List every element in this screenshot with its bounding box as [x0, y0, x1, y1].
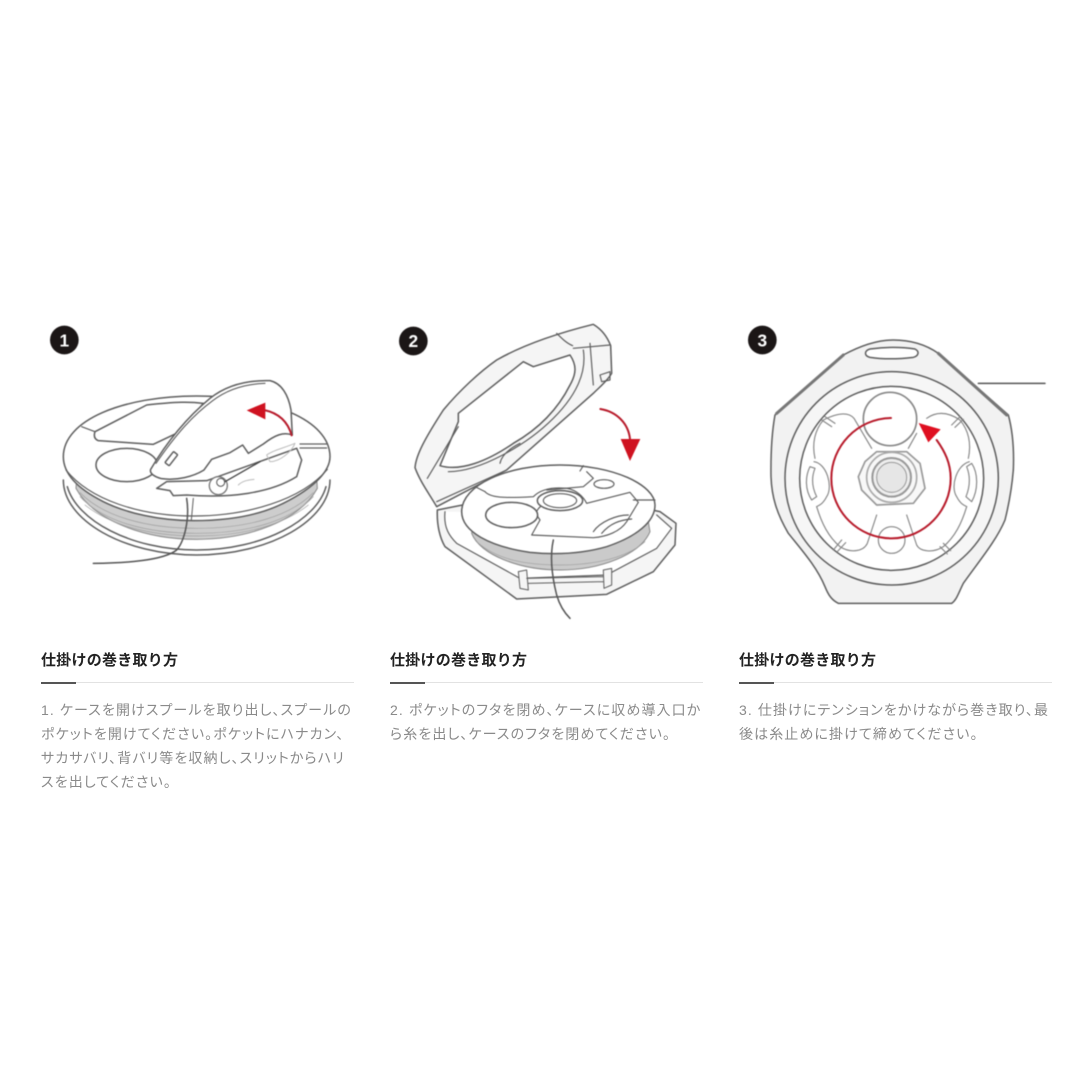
badge 3: 3: [758, 330, 768, 350]
body text 1: スを出してください。: [41, 774, 172, 790]
body text 1: [41, 702, 352, 790]
case base: [437, 488, 676, 599]
badge 2: [399, 327, 428, 355]
body text 3: [739, 702, 1049, 742]
hub: [858, 452, 925, 505]
body text 2: ら糸を出し、ケースのフタを閉めてください。: [390, 726, 671, 742]
text column 3: [739, 652, 1052, 742]
body text 1: ポケットを開けてください。ポケットにハナカン、: [41, 726, 344, 742]
leader line: [552, 540, 570, 618]
body text 1: サカサバリ、背バリ等を収納し、スリットからハリ: [41, 750, 345, 766]
heading 1: 仕掛けの巻き取り方: [41, 652, 178, 669]
rule 2: [390, 682, 703, 683]
open lid: [150, 381, 292, 479]
wound line: [76, 477, 317, 539]
text column 1: [41, 652, 354, 790]
red rotation arrow: [831, 418, 951, 538]
illustration 3: closed case from the back: [748, 326, 1045, 603]
leader line: [93, 498, 188, 563]
body text 1: 1. ケースを開けスプールを取り出し、スプールの: [41, 702, 352, 718]
badge 1: 1: [60, 330, 70, 350]
body text 3: 3. 仕掛けにテンションをかけながら巻き取り、最: [739, 702, 1049, 718]
open lid: [415, 324, 612, 507]
illustration 2: open case with spool: [399, 324, 676, 618]
rule 1: [41, 682, 354, 683]
badge 1: [50, 326, 79, 354]
hooks in pocket: [209, 443, 295, 495]
top disc: [63, 396, 330, 521]
text column 2: [390, 652, 703, 742]
bottom flange: [63, 480, 330, 555]
leader line: [978, 381, 1045, 386]
body text 2: 2. ポケットのフタを閉め、ケースに収め導入口か: [390, 702, 701, 718]
body text 3: 後は糸止めに掛けて締めてください。: [739, 726, 979, 742]
red arrow: [600, 409, 640, 461]
badge 3: [748, 326, 777, 354]
inner reel: [806, 392, 977, 554]
heading 3: 仕掛けの巻き取り方: [739, 652, 876, 669]
badge 2: 2: [409, 331, 418, 351]
red arrow: [247, 403, 292, 435]
heading 2: 仕掛けの巻き取り方: [390, 652, 527, 669]
wound line: [472, 512, 650, 570]
rule 3: [739, 682, 1052, 683]
body text 2: [390, 702, 701, 742]
illustration 1: spool with open pocket: [50, 326, 330, 563]
spool disc: [462, 465, 655, 554]
case body: [771, 340, 1014, 603]
